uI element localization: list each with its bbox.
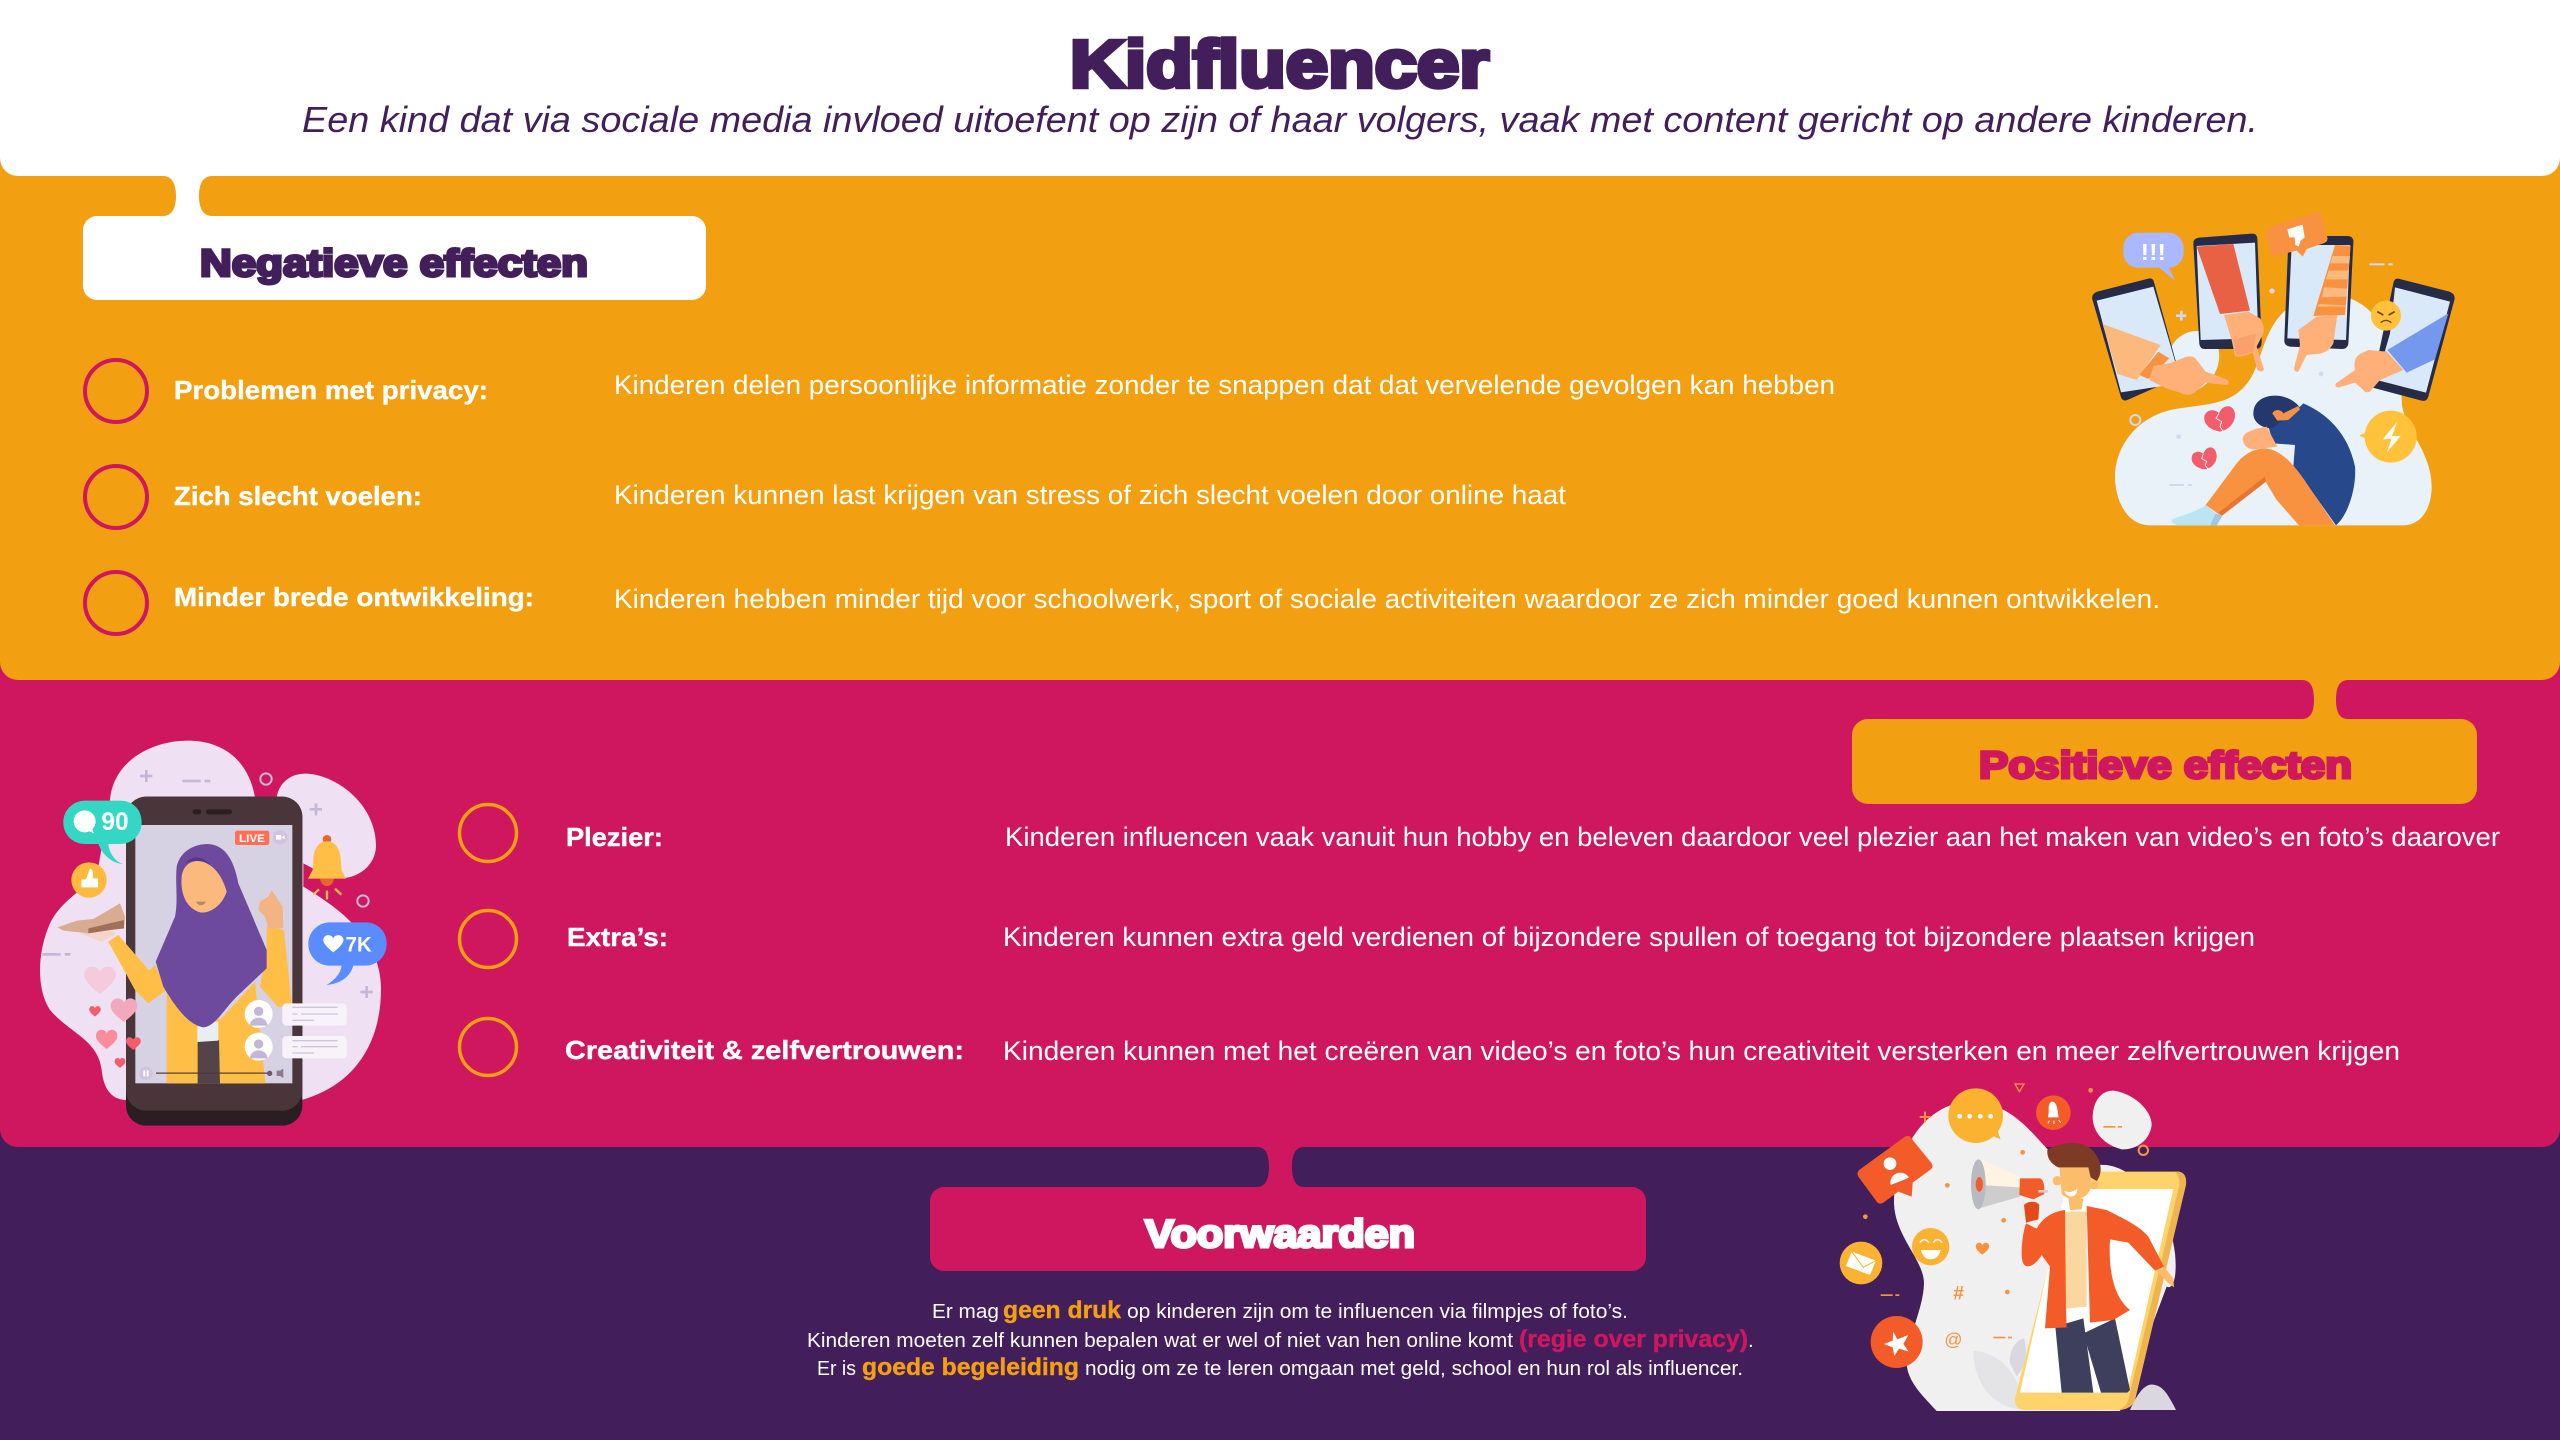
- illustration: influencer live on phone: [40, 741, 387, 1126]
- icon: lightning bubble: [2359, 411, 2417, 463]
- phone: [126, 797, 302, 1126]
- star icon: [1871, 1316, 1923, 1368]
- heading: negatieve effecten: [83, 176, 706, 300]
- heading: negatieve effecten: Negatieve effecten: [200, 243, 588, 285]
- decorative marks: [2130, 263, 2393, 486]
- conditions text: .: [1748, 1329, 1754, 1352]
- row: plezier: Kinderen influencen vaak vanuit hun hobby en beleven daardoor veel plezier aan het maken van video’s en foto’s daarover: [1005, 822, 2500, 852]
- icon: angry face: [2371, 301, 2401, 331]
- row: privacy: [85, 360, 1835, 422]
- illustration: man with megaphone stepping out of phone: [1840, 1084, 2186, 1411]
- white bubble: [2093, 1091, 2152, 1149]
- conditions text: geen druk: [1003, 1297, 1122, 1324]
- panel: positive effects section background: [0, 640, 2560, 1147]
- conditions text: goede begeleiding: [862, 1354, 1079, 1381]
- bubble: thumbs down: [2266, 213, 2327, 257]
- bubble: exclamation: !!!: [2141, 239, 2166, 265]
- row: extra's: Kinderen kunnen extra geld verdienen of bijzondere spullen of toegang tot bijzondere plaatsen krijgen: [1003, 922, 2255, 952]
- phone 1 with hand: [2092, 278, 2229, 400]
- heading: voorwaarden: [930, 1147, 1646, 1271]
- heading: positieve effecten: [1852, 680, 2477, 804]
- row: privacy: Problemen met privacy:: [174, 375, 488, 405]
- comment cards: [245, 1000, 347, 1061]
- person sitting: [2172, 396, 2355, 525]
- bubble: likes 7K: [308, 922, 387, 985]
- panel: negative effects section background: [0, 140, 2560, 680]
- heading: voorwaarden: Voorwaarden: [1145, 1213, 1415, 1256]
- bubble: comments 90: 90: [101, 808, 129, 836]
- leaves: [1973, 1338, 2176, 1410]
- row: creativiteit: Kinderen kunnen met het creëren van video’s en foto’s hun creativiteit versterken en meer zelfvertrouwen krijgen: [1003, 1036, 2400, 1066]
- conditions text: Er mag: [932, 1300, 999, 1323]
- bell icon: [2036, 1095, 2071, 1130]
- panel: header background: [0, 0, 2560, 176]
- row: slecht voelen: Kinderen kunnen last krijgen van stress of zich slecht voelen door online haat: [614, 480, 1567, 510]
- heading: positieve effecten: Positieve effecten: [1979, 745, 2352, 787]
- row: plezier: [460, 804, 2500, 862]
- row: slecht voelen: [85, 466, 1567, 528]
- row: extra's: [460, 910, 2255, 968]
- illustration: sad child surrounded by pointing phones: [2092, 213, 2455, 525]
- row: ontwikkeling: Minder brede ontwikkeling:: [174, 582, 534, 612]
- bubble: likes 7K: 7K: [346, 933, 372, 957]
- conditions text: nodig om ze te leren omgaan met geld, school en hun rol als influencer.: [1085, 1357, 1743, 1380]
- row: creativiteit: Creativiteit & zelfvertrouwen:: [565, 1035, 964, 1065]
- conditions text: Kinderen moeten zelf kunnen bepalen wat er wel of niet van hen online komt: [807, 1329, 1513, 1352]
- row: creativiteit: [460, 1018, 2400, 1076]
- live badge: LIVE: [239, 833, 265, 845]
- envelope icon: [1840, 1242, 1882, 1284]
- video controls: [139, 1067, 283, 1080]
- row: extra's: Extra’s:: [567, 922, 668, 952]
- shoe: [58, 903, 125, 942]
- panel: negative effects: [83, 176, 2160, 634]
- row: plezier: Plezier:: [566, 822, 663, 852]
- decorative marks: [42, 770, 373, 998]
- live badge: [235, 830, 287, 845]
- person bubble: [1857, 1136, 1933, 1204]
- phone 2 with hand: [2193, 234, 2264, 372]
- floating hearts: [84, 966, 141, 1068]
- row: ontwikkeling: [85, 572, 2160, 634]
- symbols: @: [1944, 1329, 1962, 1349]
- icon: thumbs up: [71, 862, 107, 898]
- speech bubble dots: [1948, 1088, 2003, 1143]
- tilted phone: [2015, 1172, 2186, 1410]
- smile icon: [1912, 1228, 1949, 1265]
- bubble: exclamation: [2123, 233, 2184, 281]
- conditions text: Er is: [817, 1357, 856, 1380]
- woman in hijab: [108, 844, 292, 1083]
- icon: broken hearts: [2192, 406, 2235, 469]
- symbols: [1863, 1084, 2148, 1349]
- title: Kidfluencer: [1070, 27, 1489, 102]
- conditions text: (regie over privacy): [1519, 1326, 1748, 1353]
- panel: positive effects: [460, 680, 2500, 1076]
- icon: bell: [308, 835, 346, 899]
- conditions text: op kinderen zijn om te influencen via filmpjes of foto’s.: [1127, 1300, 1628, 1323]
- row: privacy: Kinderen delen persoonlijke informatie zonder te snappen dat dat vervelende gevolgen kan hebben: [614, 370, 1835, 400]
- phone 3 with hand: [2284, 236, 2353, 372]
- panel: voorwaarden: [807, 1147, 1754, 1381]
- panel: voorwaarden section background: [0, 1100, 2560, 1440]
- phone 4 with hand: [2335, 279, 2455, 401]
- row: ontwikkeling: Kinderen hebben minder tijd voor schoolwerk, sport of sociale activiteiten waardoor ze zich minder goed kunnen ontwikkelen.: [614, 584, 2160, 614]
- row: slecht voelen: Zich slecht voelen:: [174, 481, 422, 511]
- megaphone: [1971, 1159, 2048, 1223]
- subtitle: Een kind dat via sociale media invloed uitoefent op zijn of haar volgers, vaak met content gericht op andere kinderen.: [302, 99, 2258, 140]
- conditions text: [807, 1297, 1754, 1381]
- bubble: comments 90: [63, 801, 142, 864]
- symbols: #: [1953, 1283, 1964, 1304]
- man with megaphone: [2022, 1143, 2174, 1393]
